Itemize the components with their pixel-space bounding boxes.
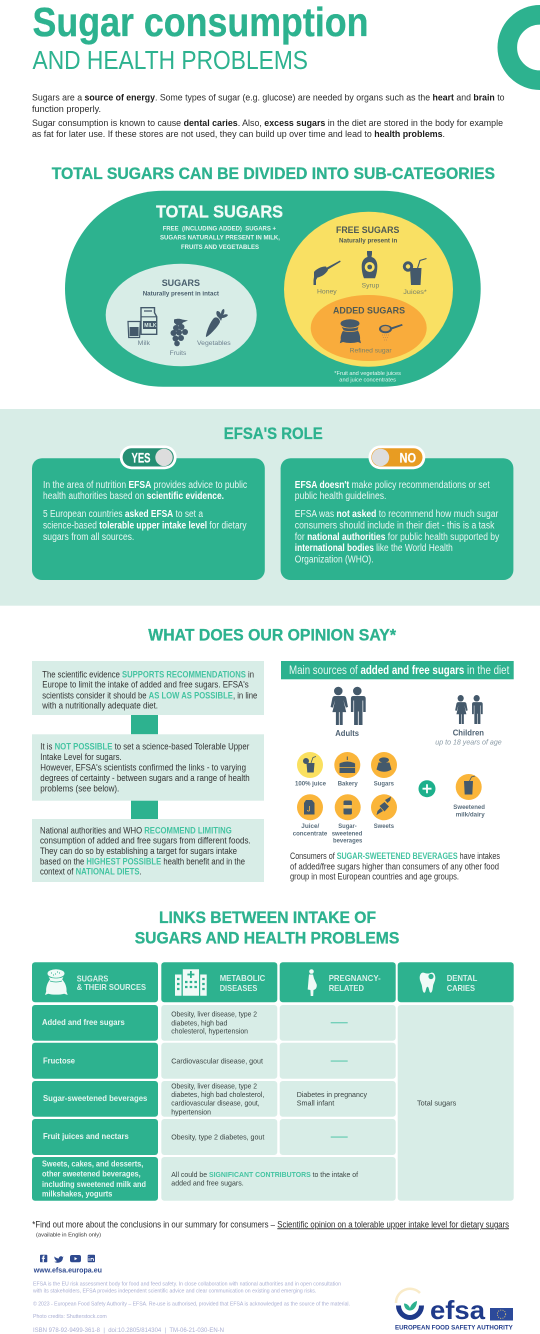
heading: links between intake: LINKS BETWEEN INTAKE OF: [159, 909, 376, 927]
panel: added sugars: [311, 295, 427, 361]
label: sugar-sweetened beverages: sweetened: [332, 830, 362, 837]
icon: sugar sack: [340, 319, 361, 343]
icon: sweetened milk: [456, 774, 482, 800]
icon: milk: [128, 308, 157, 338]
box: supports recommendations: scientists consider it should be AS LOW AS POSSIBLE, in line: [42, 690, 257, 700]
logo: EFSA: efsa: [430, 1295, 486, 1325]
heading: total sugars sub-categories: TOTAL SUGARS CAN BE DIVIDED INTO SUB-CATEGORIES: [52, 164, 495, 183]
panel: free sugars: Syrup: [362, 283, 380, 290]
panel: yes: science-based tolerable upper intake level for dietary: [43, 520, 247, 532]
label: juice concentrate: Juice/: [301, 823, 319, 830]
footnote: summary for consumers: *Find out more about the conclusions in our summary for consumers –: [32, 1219, 275, 1229]
header: dental: [398, 962, 514, 1002]
label: sweetened milk: [453, 804, 485, 818]
box: recommend limiting: National authorities and WHO RECOMMEND LIMITING: [40, 825, 232, 835]
panel: main sources: 100% juice: [295, 781, 326, 788]
box: not possible: [32, 734, 264, 801]
panel: no: international bodies like the World Health: [295, 543, 453, 554]
row: fruit juices: Fruit juices and nectars: [43, 1132, 129, 1141]
intro text: function properly.: [32, 104, 101, 115]
icon: plus: [418, 780, 436, 797]
panel: naturally present sugars: Fruits: [170, 350, 187, 357]
panel: free sugars: FREE SUGARS: [336, 225, 399, 236]
decorative ring icon: [507, 15, 540, 80]
panel: yes: health authorities based on scientific evidence.: [43, 491, 224, 502]
text: consumers: [290, 851, 500, 882]
panel: main sources: Bakery: [338, 781, 358, 788]
footer text: ISBN 978-92-9499-361-8 | doi:10.2805/814304 | TM-06-21-030-EN-N: [33, 1328, 224, 1334]
panel: free sugars: Juices*: [403, 289, 427, 296]
footer text: Photo credits: Shutterstock.com: [33, 1314, 107, 1320]
logo: EFSA: [395, 1289, 513, 1331]
box: not possible: problems (see below).: [40, 783, 119, 793]
banner: main sources: Main sources of added and free sugars in the diet: [289, 665, 510, 677]
total sugars heading: FRUITS AND VEGETABLES: [181, 244, 260, 251]
website: www.efsa.europa.eu: [33, 1266, 102, 1275]
icon: juice glass: [403, 258, 426, 285]
box: not possible: It is NOT POSSIBLE to set a science-based Tolerable Upper: [40, 742, 249, 752]
row: fructose: Cardiovascular disease, gout: [171, 1056, 264, 1065]
panel: added sugars: ADDED SUGARS: [333, 306, 405, 317]
panel: main sources: Sweets: [374, 823, 394, 830]
title: Sugar consumption: [32, 0, 368, 45]
header: sugars: SUGARS: [77, 975, 109, 984]
footer text: © 2023 - European Food Safety Authority – EFSA. Re-use is authorised, provided that EFSA is acknowledged as the source of the material.: [33, 1300, 350, 1307]
row: sugar-sweetened beverages: cardiovascular disease, gout,: [171, 1099, 260, 1108]
row: sugar-sweetened beverages: Obesity, liver disease, type 2: [171, 1081, 257, 1090]
box: recommend limiting: context of NATIONAL DIETS.: [40, 867, 142, 877]
icon: milk: MILK: [144, 323, 157, 329]
icon: sweets: [371, 794, 397, 820]
toggle: no: NO: [400, 450, 416, 466]
toggle: yes: [120, 446, 177, 469]
panel: yes: In the area of nutrition EFSA provides advice to public: [43, 480, 247, 491]
label: sugar-sweetened beverages: Sugar-: [338, 823, 357, 830]
footnote: juices: *Fruit and vegetable juices: [334, 371, 401, 377]
toggle: no: [368, 446, 425, 469]
footer text: [33, 1282, 350, 1334]
text: consumers: of added/free sugars higher than consumers of any other food: [290, 861, 499, 871]
footnote: summary for consumers: [32, 1219, 509, 1239]
intro text: Sugar consumption is known to cause dental caries. Also, excess sugars in the diet are stored in the body for example: [32, 118, 503, 129]
row: added and free sugars: diabetes, high bad: [171, 1018, 227, 1027]
box: supports recommendations: with a nutritionally adequate diet.: [41, 701, 158, 711]
icon: sugars: [371, 752, 397, 778]
heading: what does our opinion say: WHAT DOES OUR OPINION SAY*: [148, 626, 396, 645]
panel: no: EFSA was not asked to recommend how much sugar: [295, 509, 499, 520]
panel: yes: [32, 458, 265, 580]
panel: no: Organization (WHO).: [295, 555, 374, 566]
row: added and free sugars: [32, 1005, 396, 1041]
footnote: summary for consumers: (available in English only): [36, 1233, 101, 1239]
panel: free sugars: Honey: [317, 288, 337, 295]
panel: naturally present sugars: Milk: [138, 340, 151, 347]
header: sugars: [32, 962, 158, 1002]
footnote: juices: and juice concentrates: [339, 377, 396, 383]
header: dental: DENTAL: [447, 974, 477, 983]
row: added and free sugars: cholesterol, hypertension: [171, 1027, 248, 1036]
label: children: up to 18 years of age: [435, 740, 502, 747]
row: sugar-sweetened beverages: diabetes, high bad cholesterol,: [171, 1090, 264, 1099]
box: recommend limiting: They can do so by establishing a target for sugars intake: [40, 846, 237, 856]
panel: yes: 5 European countries asked EFSA to set a: [43, 509, 203, 520]
box: supports recommendations: [32, 661, 264, 715]
icon: carrot: [206, 309, 228, 337]
box: supports recommendations: The scientific evidence SUPPORTS RECOMMENDATIONS in: [42, 669, 254, 679]
connector: [131, 801, 158, 819]
panel: naturally present sugars: [106, 264, 257, 366]
box: not possible: However, EFSA's scientists confirmed the links - to varying: [40, 763, 246, 773]
icon: juice concentrate: [297, 794, 323, 820]
icon: 100% juice: [297, 752, 323, 778]
panel: no: [281, 458, 513, 580]
icon: sugar-sweetened beverages: [335, 794, 361, 820]
row: sugar-sweetened beverages: Diabetes in pregnancy: [297, 1090, 367, 1099]
panel: no: consumers should include in their diet - this is a task: [295, 520, 495, 532]
row: sweets and cakes: added and free sugars.: [171, 1179, 244, 1188]
icon: adults: [331, 687, 366, 725]
box: supports recommendations: Europe to limit the intake of added and free sugars. EFSA's: [42, 680, 249, 690]
row: sweets and cakes: [32, 1157, 396, 1201]
table: links: [32, 962, 514, 1201]
panel: naturally present sugars: Vegetables: [197, 340, 231, 347]
panel: added sugars: Refined sugar: [350, 348, 393, 355]
header: metabolic: DISEASES: [220, 984, 258, 993]
box: not possible: Intake Level for sugars.: [40, 752, 122, 762]
panel: free sugars: [284, 212, 453, 367]
panel: no: EFSA doesn't make policy recommendations or set: [295, 480, 490, 491]
total sugars heading: FREE (INCLUDING ADDED) SUGARS +: [163, 226, 276, 233]
row: fructose: [32, 1043, 396, 1079]
row: added and free sugars: Obesity, liver disease, type 2: [171, 1010, 257, 1019]
label: sweetened milk: Sweetened: [453, 804, 485, 811]
icon: syrup bottle: [362, 251, 377, 278]
box: recommend limiting: consumption of added and free sugars from different foods.: [40, 836, 251, 846]
logo: EFSA: EUROPEAN FOOD SAFETY AUTHORITY: [395, 1324, 513, 1331]
panel: free sugars: Naturally present in: [339, 237, 397, 244]
panel: naturally present sugars: SUGARS: [162, 278, 200, 289]
header: pregnancy: PREGNANCY-: [329, 974, 381, 983]
header: sugars: & THEIR SOURCES: [77, 983, 146, 992]
panel: total sugars diagram: [65, 191, 481, 387]
header: metabolic: [161, 962, 277, 1002]
heading: links between intake: SUGARS AND HEALTH PROBLEMS: [135, 929, 399, 947]
intro text: Sugars are a source of energy. Some types of sugar (e.g. glucose) are needed by organs such as the heart and brain to: [32, 92, 504, 104]
row: sweets and cakes: including sweetened milk and: [42, 1180, 146, 1189]
row: sugar-sweetened beverages: Sugar-sweetened beverages: [43, 1094, 148, 1103]
header: pregnancy: RELATED: [329, 984, 364, 993]
row: sweets and cakes: Sweets, cakes, and desserts,: [42, 1160, 143, 1169]
box: not possible: degrees of certainty - between sugars and a range of health: [40, 773, 250, 783]
box: recommend limiting: based on the HIGHEST POSSIBLE health benefit and in the: [40, 856, 245, 866]
panel: main sources: Sugars: [374, 781, 394, 788]
label: sweetened milk: milk/dairy: [456, 811, 485, 818]
heading: EFSA's role: EFSA'S ROLE: [224, 424, 323, 443]
intro text: as fat for later use. If these stores are not used, they can build up over time and lead to health problems.: [32, 129, 445, 140]
icon: children: [455, 695, 483, 724]
row: sugar-sweetened beverages: Small infant: [297, 1098, 335, 1107]
panel: yes: sugars from all sources.: [43, 532, 134, 543]
footnote: juices: [334, 371, 401, 383]
label: children: [435, 729, 502, 747]
row: sweets and cakes: other sweetened beverages,: [42, 1170, 141, 1179]
toggle: yes: YES: [132, 450, 150, 466]
row: sweets and cakes: milkshakes, yogurts: [42, 1190, 113, 1199]
icon: spoon: [379, 324, 403, 340]
header: pregnancy: [280, 962, 396, 1002]
panel: naturally present sugars: Naturally present in intact: [143, 291, 220, 298]
title: [32, 0, 368, 75]
label: sugar-sweetened beverages: beverages: [333, 837, 363, 844]
title: AND HEALTH PROBLEMS: [32, 47, 308, 75]
label: children: Children: [453, 729, 484, 738]
total sugars heading: SUGARS NATURALLY PRESENT IN MILK,: [160, 235, 280, 242]
column: dental caries: Total sugars: [417, 1098, 456, 1107]
row: sugar-sweetened beverages: [32, 1081, 396, 1117]
icons: social media: [40, 1255, 95, 1263]
panel: main sources: [281, 661, 514, 882]
row: sugar-sweetened beverages: hypertension: [171, 1107, 211, 1116]
label: juice concentrate: concentrate: [293, 830, 328, 837]
icon: bakery: [334, 752, 360, 778]
icon: grapes: [170, 319, 188, 346]
header: metabolic: METABOLIC: [220, 974, 265, 983]
footer text: with its stakeholders, EFSA provides independent scientific advice and clear communication on existing and emerging risks.: [33, 1288, 316, 1294]
total sugars heading: TOTAL SUGARS: [156, 202, 283, 222]
row: fruit juices: [32, 1119, 396, 1155]
box: recommend limiting: [32, 819, 264, 882]
row: fructose: Fructose: [43, 1056, 75, 1065]
header: dental: CARIES: [447, 984, 475, 993]
row: sweets and cakes: All could be SIGNIFICANT CONTRIBUTORS to the intake of: [171, 1170, 359, 1179]
heading: links between intake: [135, 909, 399, 947]
panel: opinion flow: [32, 661, 264, 882]
row: added and free sugars: Added and free sugars: [42, 1018, 125, 1027]
footnote: summary for consumers: Scientific opinion on a tolerable upper intake level for dietary sugars: [277, 1219, 509, 1229]
icon: honey dipper: [314, 260, 341, 285]
label: sugar-sweetened beverages: [332, 823, 363, 844]
total sugars heading: [156, 202, 283, 251]
panel: main sources: Adults: [335, 729, 360, 738]
label: juice concentrate: [293, 823, 328, 837]
text: consumers: Consumers of SUGAR-SWEETENED BEVERAGES have intakes: [290, 851, 500, 861]
banner: main sources: [281, 661, 514, 679]
column: dental caries: [398, 1005, 514, 1201]
panel: EFSA's role: [0, 409, 540, 606]
row: fruit juices: Obesity, type 2 diabetes, gout: [171, 1132, 265, 1141]
text: consumers: group in most European countries and age groups.: [290, 872, 459, 882]
footer text: EFSA is the EU risk assessment body for food and feed safety. In close collaboration with national authorities and in open consultation: [33, 1282, 341, 1288]
connector: [131, 715, 158, 734]
panel: no: for national authorities for public health supported by: [295, 532, 499, 543]
intro text: [32, 92, 504, 140]
panel: no: public health guidelines.: [295, 491, 386, 502]
